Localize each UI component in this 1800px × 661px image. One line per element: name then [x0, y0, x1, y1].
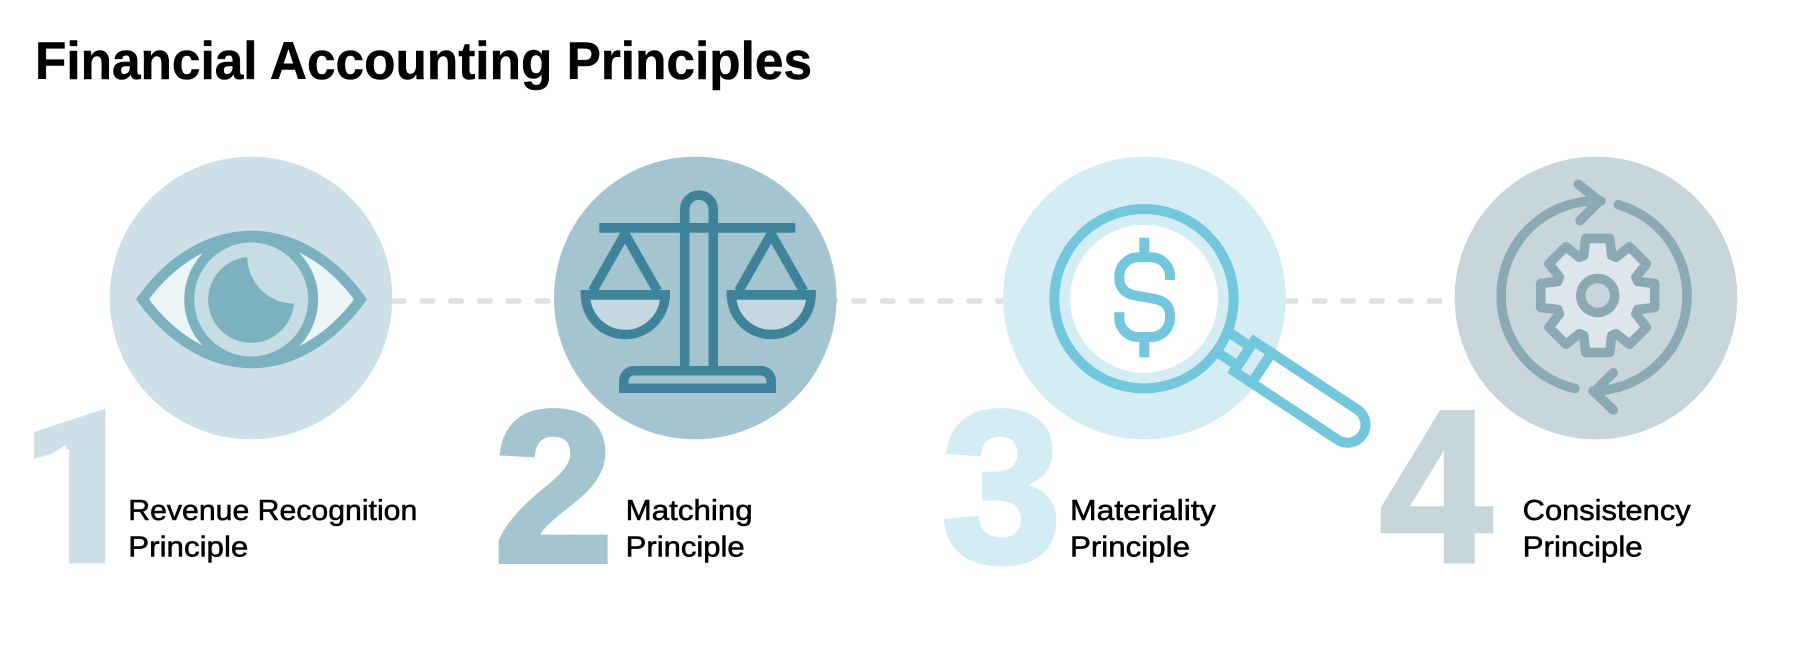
circle 3: [1003, 157, 1286, 439]
icon: magnifying glass with dollar: [1054, 209, 1372, 450]
icon: gear with cycle arrows: [1501, 184, 1687, 410]
label 4: Consistency: [1523, 495, 1691, 527]
label 2: Matching: [626, 495, 753, 527]
label 4: Principle: [1523, 532, 1643, 564]
icon: balance scale: [581, 195, 816, 388]
label 1: Principle: [128, 532, 248, 564]
label 3: Principle: [1070, 532, 1190, 564]
panel: revenue recognition principle: [34, 156, 416, 564]
panel: matching principle: [494, 157, 837, 607]
label 1: [128, 495, 417, 564]
number 1: 1: [19, 363, 142, 611]
label 2: Principle: [626, 532, 745, 564]
label 3: [1070, 495, 1216, 564]
label 4: [1523, 495, 1691, 564]
number 4: 4: [1380, 365, 1492, 607]
panel: consistency principle: [1380, 157, 1737, 607]
number 3: 3: [941, 366, 1062, 608]
circle 2: [554, 157, 837, 439]
panel: materiality principle: [941, 157, 1372, 607]
label 2: [626, 495, 753, 564]
circle 1: [110, 157, 392, 439]
label 3: Materiality: [1070, 495, 1216, 527]
icon: eye: [142, 236, 360, 363]
title: Financial Accounting Principles: [35, 32, 812, 91]
circle 4: [1455, 157, 1737, 439]
number 2: 2: [494, 366, 614, 608]
label 1: Revenue Recognition: [128, 495, 417, 527]
